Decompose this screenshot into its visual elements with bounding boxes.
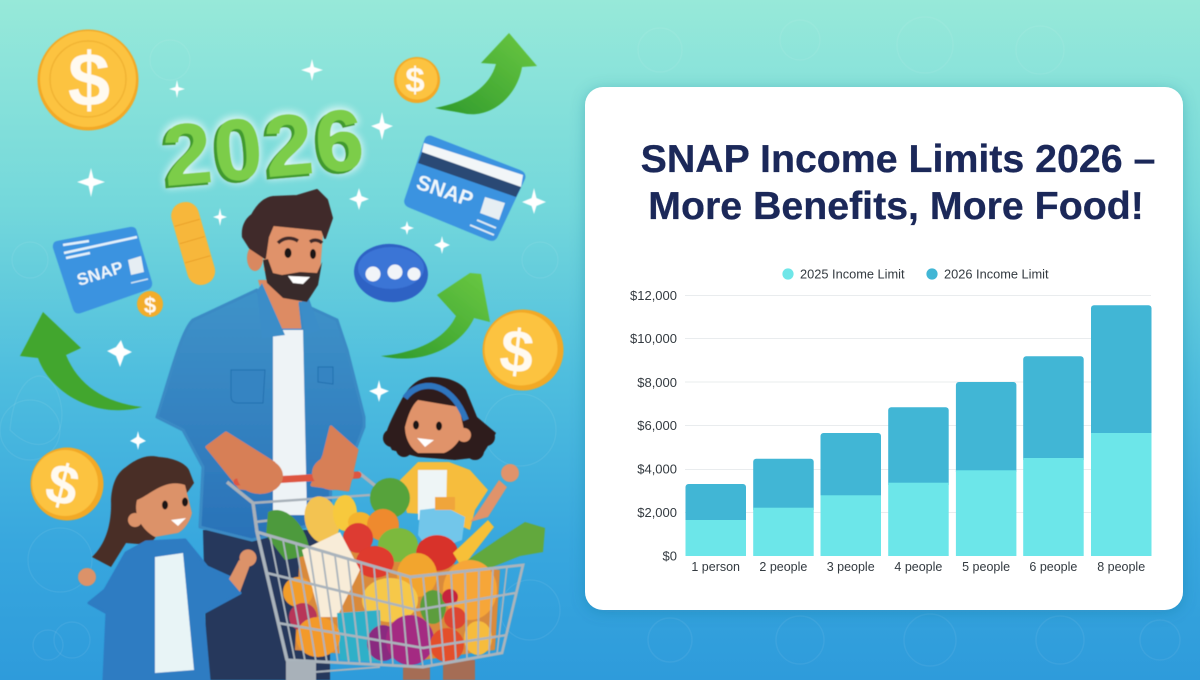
icon: middle right green arrow: [381, 273, 490, 359]
x axis labels: 3 people: [827, 560, 875, 574]
head: [136, 483, 192, 537]
father neck: [258, 280, 305, 332]
y axis grid lines and labels: $0: [663, 548, 677, 564]
icon: tiny dollar coin: [137, 291, 163, 318]
white tee: [418, 470, 447, 520]
father face: [263, 222, 324, 302]
father trousers: [203, 530, 330, 680]
x axis labels: 1 person: [691, 560, 740, 574]
milk carton: [302, 532, 360, 617]
chart legend: 2025 Income Limit: [800, 266, 905, 282]
icon: sparkles: [77, 59, 546, 450]
icon: left SNAP card: SNAP: [75, 258, 125, 290]
father forearms: [207, 427, 357, 490]
bar chart: [630, 288, 1152, 574]
shopping cart: [227, 456, 545, 680]
y axis grid lines and labels: $6,000: [637, 418, 677, 433]
icon: large dollar coin: [38, 30, 138, 130]
x axis labels: [691, 560, 1145, 574]
chart legend: 2026 Income Limit: [944, 266, 1049, 282]
blue jacket: [89, 540, 240, 680]
cart base: [287, 662, 380, 680]
icon: left SNAP card: [53, 227, 152, 314]
teal package: [337, 610, 382, 662]
food backing: [295, 545, 500, 660]
2025 income limit bars: [686, 433, 1152, 556]
leafy greens: [370, 478, 410, 518]
icon: small top dollar coin: $: [405, 61, 425, 100]
year 2026 heading art: 2026: [158, 91, 369, 205]
icon: small top dollar coin: [394, 57, 440, 103]
icon: left green arrow: [20, 312, 142, 410]
raised arm: [470, 480, 507, 522]
food pile: [266, 478, 545, 665]
father beard: [263, 259, 322, 302]
curly hair: [383, 377, 496, 460]
panel: chart card: [585, 87, 1183, 610]
headband: [405, 386, 466, 420]
icon: right dollar coin: $: [497, 316, 537, 387]
y axis grid lines and labels: $4,000: [637, 462, 677, 476]
father: [157, 190, 364, 680]
father ear: [247, 245, 263, 271]
left child: [78, 456, 256, 680]
father hands: [237, 458, 283, 494]
icon: large dollar coin: $: [68, 38, 110, 123]
father collar: [257, 283, 320, 338]
shirt pockets: [231, 370, 265, 403]
icon: tiny dollar coin: $: [144, 293, 156, 318]
icon: right SNAP card: [404, 136, 525, 241]
father hair: [243, 190, 332, 258]
back wires: [252, 495, 370, 522]
yellow cardigan: [400, 462, 488, 530]
illustration: floating money and SNAP items: [20, 30, 564, 520]
head: [405, 400, 464, 453]
milk jug: [418, 507, 465, 552]
hair: [92, 456, 194, 567]
year 2026 heading art: 2026: [157, 93, 367, 207]
title: SNAP Income Limits 2026 –: [641, 137, 1155, 181]
icon: bread stick: [168, 199, 218, 288]
x axis labels: 5 people: [962, 560, 1010, 574]
icon: top right green arrow: [435, 33, 537, 114]
hands: [78, 568, 96, 586]
right child: [383, 377, 519, 680]
illustration: family with shopping cart: [78, 190, 545, 680]
icon: lower left dollar coin: $: [40, 450, 85, 519]
y axis grid lines and labels: [630, 288, 1151, 564]
title: More Benefits, More Food!: [648, 184, 1144, 228]
icon: right dollar coin: [482, 310, 564, 390]
icon: right SNAP card: SNAP: [413, 171, 476, 212]
icon: blue message bubble: [352, 241, 430, 305]
y axis grid lines and labels: $10,000: [630, 331, 677, 346]
legs: [403, 660, 475, 680]
icon: lower left dollar coin: [30, 448, 104, 520]
leek: [453, 522, 545, 570]
father t-shirt: [273, 330, 307, 515]
x axis labels: 2 people: [759, 560, 807, 574]
y axis grid lines and labels: $8,000: [637, 375, 677, 390]
father shirt: [157, 290, 364, 540]
y axis grid lines and labels: $2,000: [637, 505, 677, 520]
corn and peppers: [299, 492, 345, 548]
cart handle: [227, 472, 378, 660]
wire basket: [257, 532, 523, 667]
y axis grid lines and labels: $12,000: [630, 288, 677, 303]
x axis labels: 4 people: [894, 560, 942, 574]
x axis labels: 8 people: [1097, 560, 1145, 574]
tomatoes and peppers: [343, 523, 373, 553]
chart legend: [782, 266, 1049, 282]
white tee: [155, 553, 194, 673]
2026 income limit bars: [686, 305, 1152, 522]
year 2026 heading art: 2026: [159, 91, 370, 205]
x axis labels: 6 people: [1029, 560, 1077, 574]
